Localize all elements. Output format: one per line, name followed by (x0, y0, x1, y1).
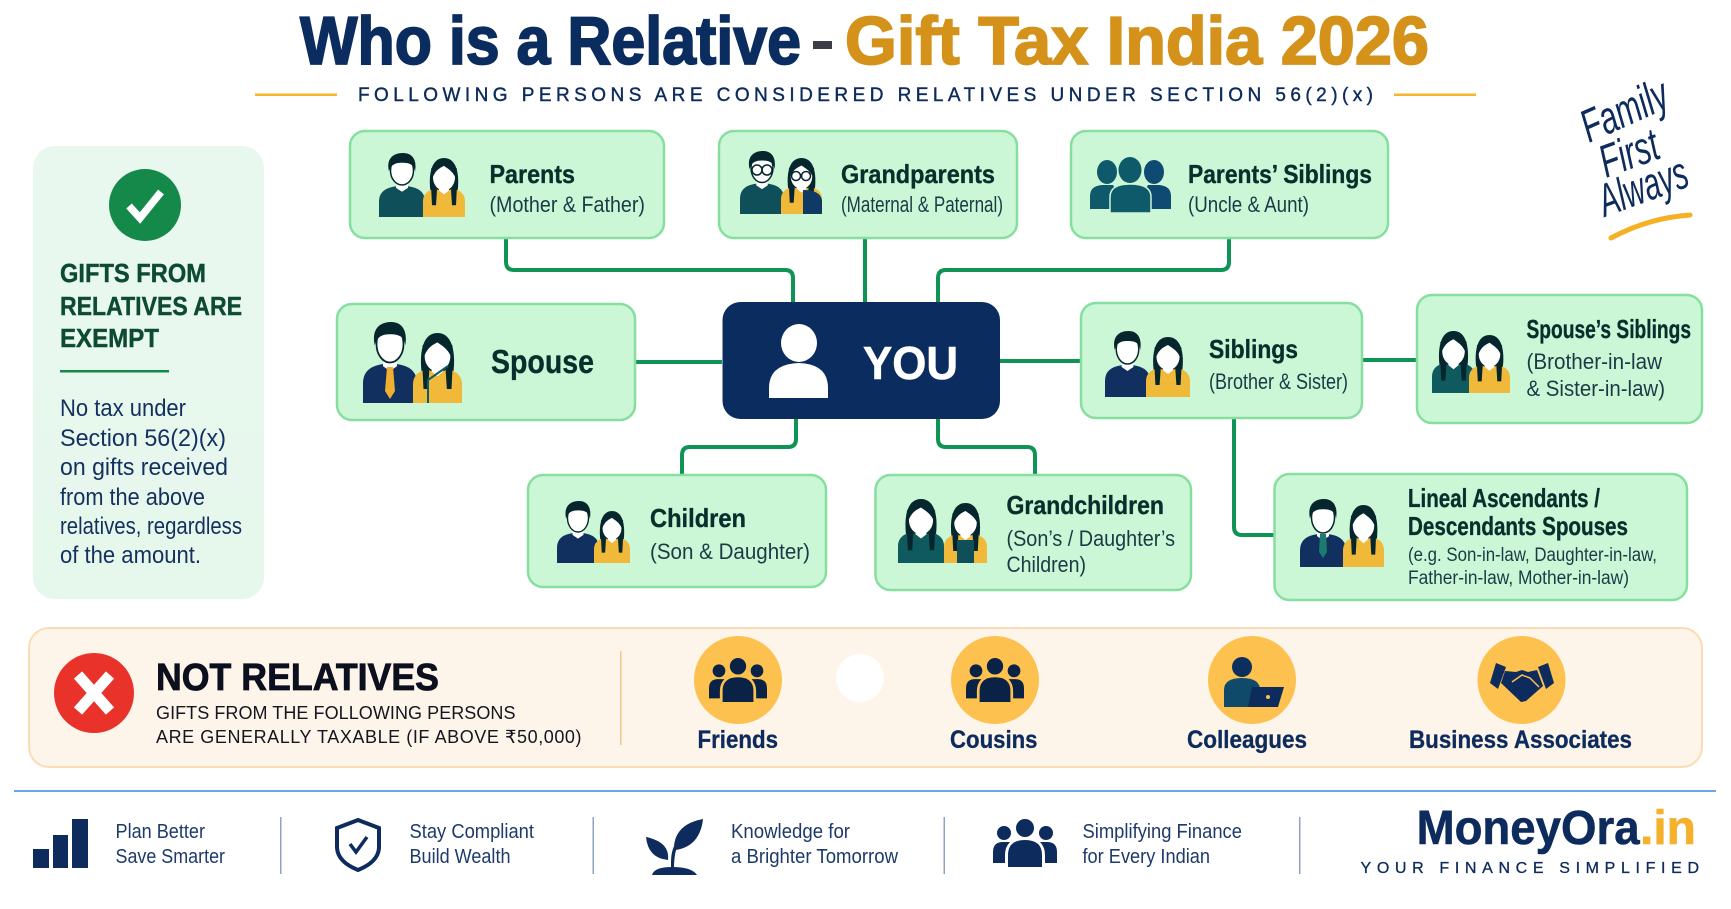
footer item: plan better: Plan Better (116, 821, 205, 843)
icon: grandparents (740, 151, 822, 214)
logo: MoneyOra.in (1360, 802, 1699, 877)
icon: shield (337, 820, 379, 870)
icon: people (993, 819, 1057, 867)
panel heading: EXEMPT (60, 323, 159, 353)
handwritten note: Family First Always: Family (1572, 67, 1678, 152)
icon: bar chart (33, 819, 88, 868)
panel body text: from the above (60, 484, 205, 511)
footer item: simplifying finance: for Every Indian (1082, 846, 1210, 868)
box: children: (Son & Daughter) (650, 539, 810, 564)
title: Who is a Relative (300, 3, 801, 79)
item: cousins (950, 636, 1039, 754)
panel: gifts from relatives are exempt (33, 146, 264, 599)
footer item: stay compliant (337, 820, 534, 870)
icon: red cross (54, 653, 134, 733)
icon: couple in-laws (1300, 499, 1384, 567)
icon: siblings (1105, 331, 1190, 397)
box: grandchildren: (Son’s / Daughter’s (1006, 526, 1175, 551)
icon: grandchildren (898, 499, 987, 563)
logo: MoneyOra.in: YOUR FINANCE SIMPLIFIED (1360, 860, 1699, 877)
footer item: plan better: Save Smarter (116, 846, 225, 868)
icon: parents (379, 153, 465, 217)
icon: in-law siblings (1432, 331, 1510, 393)
box: lineal ascendants / descendants spouses: Lineal Ascendants / (1408, 483, 1600, 513)
panel body text: No tax under (60, 395, 186, 422)
panel body text: of the amount. (60, 542, 201, 569)
icon: plant (646, 819, 703, 875)
panel body text: on gifts received (60, 454, 228, 481)
box: children (528, 475, 826, 587)
title: Gift Tax India 2026 (845, 3, 1429, 79)
box: grandchildren (876, 475, 1191, 590)
box: parents: Parents (490, 159, 575, 189)
footer item: knowledge: Knowledge for (731, 821, 850, 843)
box: parents' siblings: Parents’ Siblings (1188, 159, 1372, 189)
footer item: simplifying finance: Simplifying Finance (1082, 821, 1242, 843)
icon: children (557, 501, 630, 563)
box: parents' siblings: (Uncle & Aunt) (1188, 192, 1309, 217)
box: spouse's siblings (1417, 295, 1702, 423)
white blank circle (836, 654, 884, 702)
box: lineal ascendants / descendants spouses: (e.g. Son-in-law, Daughter-in-law, (1408, 545, 1657, 566)
footer item: simplifying finance (993, 819, 1242, 868)
box: spouse (337, 304, 635, 420)
not relatives note (156, 703, 582, 747)
footer item: stay compliant: Stay Compliant (410, 821, 534, 843)
handwritten note: Family First Always: First (1592, 118, 1667, 187)
box: grandparents (719, 131, 1017, 238)
item: friends (694, 636, 782, 754)
not relatives heading: NOT RELATIVES (156, 657, 439, 699)
panel heading (60, 258, 242, 353)
box: lineal ascendants / descendants spouses (1274, 474, 1687, 600)
center node: you (722, 302, 1000, 419)
handwritten note: Family First Always (1572, 67, 1695, 238)
box: lineal ascendants / descendants spouses: Father-in-law, Mother-in-law) (1408, 568, 1629, 589)
box: siblings: Siblings (1209, 334, 1298, 364)
icon: couple (363, 322, 462, 403)
icon: green check (109, 169, 181, 241)
footer item: stay compliant: Build Wealth (410, 846, 510, 868)
item: colleagues: Colleagues (1187, 726, 1307, 754)
panel body text (60, 395, 242, 569)
footer item: knowledge (646, 819, 899, 875)
center node: you: YOU (863, 337, 958, 389)
item: business associates: Business Associates (1409, 726, 1632, 754)
logo: MoneyOra.in: .in (1640, 802, 1696, 855)
item: friends: Friends (698, 726, 778, 754)
logo: MoneyOra.in: MoneyOra (1417, 802, 1640, 855)
box: grandparents: (Maternal & Paternal) (841, 192, 1003, 217)
panel heading: RELATIVES ARE (60, 291, 242, 321)
panel body text: relatives, regardless (60, 513, 242, 540)
panel heading: GIFTS FROM (60, 258, 206, 288)
box: grandchildren: Children) (1006, 552, 1086, 577)
box: siblings (1081, 303, 1362, 418)
box: parents (350, 131, 664, 238)
item: cousins: Cousins (950, 726, 1038, 754)
panel: not relatives (29, 628, 1702, 767)
not relatives note: GIFTS FROM THE FOLLOWING PERSONS (156, 703, 516, 723)
box: parents' siblings (1071, 131, 1388, 238)
panel body text: Section 56(2)(x) (60, 425, 226, 452)
connectors (506, 238, 1417, 535)
box: grandparents: Grandparents (841, 159, 995, 189)
box: lineal ascendants / descendants spouses: Descendants Spouses (1408, 511, 1628, 541)
footer item: plan better (33, 819, 225, 868)
icon: three people (1090, 157, 1171, 213)
item: colleagues (1187, 636, 1307, 754)
not relatives note: ARE GENERALLY TAXABLE (IF ABOVE ₹50,000) (156, 727, 582, 747)
subtitle: FOLLOWING PERSONS ARE CONSIDERED RELATIVES UNDER SECTION 56(2)(x) (358, 85, 1373, 106)
box: grandchildren: Grandchildren (1006, 490, 1164, 520)
item: business associates (1409, 636, 1632, 754)
box: spouse's siblings: & Sister-in-law) (1526, 376, 1665, 401)
title (300, 3, 1429, 79)
box: siblings: (Brother & Sister) (1209, 369, 1348, 394)
box: children: Children (650, 503, 746, 533)
box: spouse's siblings: (Brother-in-law (1526, 349, 1662, 374)
icon: person (769, 324, 828, 398)
footer item: knowledge: a Brighter Tomorrow (731, 846, 899, 868)
box: spouse: Spouse (491, 343, 594, 380)
box: parents: (Mother & Father) (490, 192, 645, 217)
